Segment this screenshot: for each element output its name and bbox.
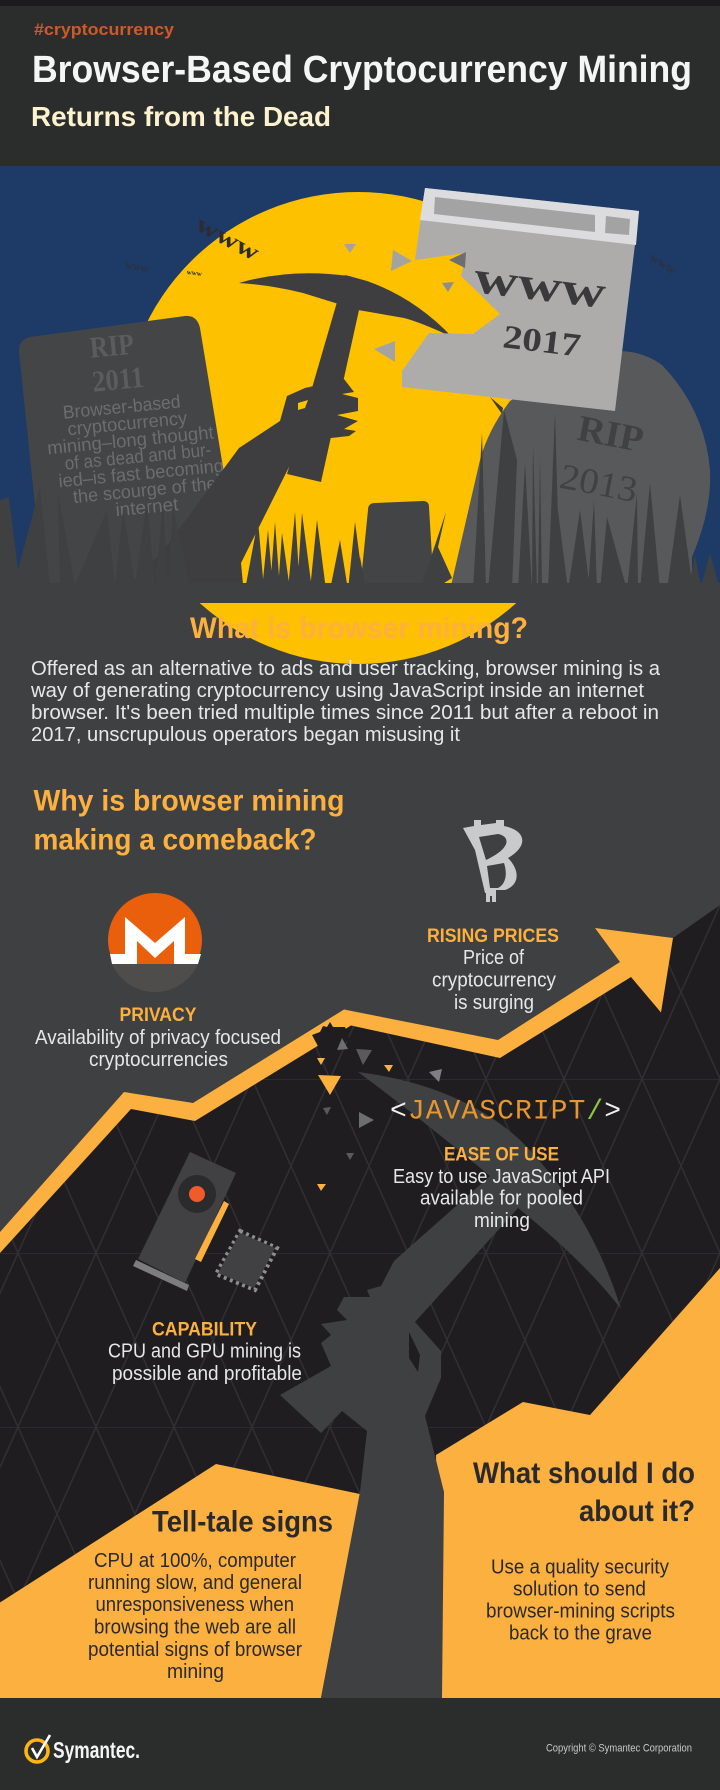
intro paragraph: Offered as an alternative to ads and user tracking, browser mining is a	[31, 658, 661, 680]
text: capability	[108, 1319, 302, 1385]
text: rising prices: cryptocurrency	[432, 970, 556, 992]
tombstone: RIP 2013	[450, 351, 710, 590]
text: tell-tale signs: CPU at 100%, computer	[94, 1550, 296, 1572]
tombstone: RIP 2011	[19, 316, 240, 592]
text: what should i do	[473, 1457, 695, 1645]
text: what should i do: browser-mining scripts	[486, 1600, 675, 1622]
tombstone: RIP 2011: RIP	[88, 328, 135, 365]
flying www bats: www	[124, 259, 150, 275]
header band	[0, 0, 720, 166]
text: what should i do: What should I do	[473, 1457, 695, 1490]
orange panel: left	[0, 1464, 360, 1698]
icon: graphics card	[133, 1152, 236, 1291]
tombstone: RIP 2011: the scourge of the	[72, 472, 217, 507]
logo: symantec	[26, 1735, 140, 1763]
text: rising prices: RISING PRICES	[427, 926, 559, 947]
text: what should i do: Use a quality security	[491, 1556, 669, 1578]
intro paragraph	[30, 658, 661, 746]
dark rising mountain panel	[0, 905, 720, 1700]
text: ease of use	[393, 1145, 610, 1232]
intro paragraph: 2017, unscrupulous operators began misusing it	[31, 724, 460, 746]
text: privacy	[35, 1005, 281, 1071]
moon	[122, 192, 594, 664]
tombstone: RIP 2013: RIP	[574, 408, 647, 461]
text: rising prices: is surging	[454, 992, 534, 1014]
rising arrow	[0, 928, 673, 1253]
grass	[0, 397, 720, 603]
night sky	[0, 166, 720, 591]
browser shards	[344, 244, 466, 362]
text: ease of use: Easy to use JavaScript API	[393, 1166, 610, 1188]
tombstone: RIP 2011: Browser-based	[62, 390, 181, 423]
tombstone: RIP 2011: mining–long thought	[46, 421, 214, 458]
intro paragraph: way of generating cryptocurrency using JavaScript inside an internet	[30, 680, 644, 702]
browser window being smashed	[402, 188, 639, 411]
text: ease of use: mining	[474, 1210, 530, 1232]
hand gap	[409, 1332, 420, 1372]
browser window being smashed: www	[471, 251, 609, 318]
browser window being smashed: 2017	[501, 319, 583, 365]
tombstone: RIP 2011: of as dead and bur-	[64, 439, 212, 474]
text: capability: CAPABILITY	[152, 1319, 257, 1340]
heading: why comeback: Why is browser mining	[34, 784, 344, 818]
heading: what is browser mining: What is browser mining?	[190, 612, 528, 645]
text: tell-tale signs: potential signs of browser	[88, 1639, 302, 1661]
text: tell-tale signs: Tell-tale signs	[152, 1506, 333, 1539]
text: ease of use: available for pooled	[420, 1188, 583, 1210]
hashtag: #cryptocurrency	[34, 20, 175, 39]
tombstone: RIP 2011: ied–is fast becoming	[57, 455, 225, 491]
text: privacy: Availability of privacy focused	[35, 1027, 281, 1049]
text: privacy: cryptocurrencies	[89, 1049, 228, 1071]
graveyard scene	[0, 166, 720, 664]
subtitle: Returns from the Dead	[31, 101, 331, 132]
text: what should i do: back to the grave	[509, 1623, 652, 1645]
arm and pickaxe silhouette	[280, 1072, 621, 1698]
tombstone: RIP 2013: 2013	[557, 456, 641, 510]
text: tell-tale signs	[88, 1506, 333, 1683]
icon: bitcoin	[463, 820, 522, 902]
text: what should i do: about it?	[579, 1495, 695, 1528]
icon: cpu chip	[216, 1231, 277, 1290]
flying www bats	[124, 211, 680, 278]
text: capability: possible and profitable	[112, 1363, 302, 1385]
title: Browser-Based Cryptocurrency Mining	[32, 49, 692, 91]
flying www bats: www	[186, 268, 203, 278]
text: rising prices	[427, 926, 559, 1014]
flying www bats: www	[191, 211, 264, 267]
raised arm with pickaxe	[120, 273, 452, 595]
text: what should i do: solution to send	[513, 1579, 646, 1601]
text: privacy: PRIVACY	[120, 1005, 197, 1026]
orange panel: right	[436, 1268, 720, 1698]
flying www bats: www	[648, 249, 680, 278]
text: ease of use: EASE OF USE	[444, 1145, 559, 1166]
text: capability: CPU and GPU mining is	[108, 1341, 301, 1363]
heading: why comeback	[34, 784, 344, 856]
copyright: Copyright © Symantec Corporation	[546, 1742, 692, 1754]
tombstone: RIP 2011: cryptocurrency	[67, 407, 189, 439]
logo: symantec: Symantec.	[53, 1737, 140, 1763]
footer	[0, 1698, 720, 1790]
tombstone: RIP 2011: internet	[114, 493, 179, 520]
small tombstone	[360, 501, 434, 590]
text: tell-tale signs: mining	[167, 1661, 224, 1683]
heading: why comeback: making a comeback?	[34, 824, 316, 856]
icon: monero	[108, 893, 202, 992]
text: tell-tale signs: running slow, and general	[88, 1572, 302, 1594]
tombstone: RIP 2011: 2011	[91, 361, 146, 399]
text: tell-tale signs: unresponsiveness when	[96, 1594, 294, 1616]
icon: javascript wordmark: <JAVASCRIPT/>	[390, 1096, 621, 1128]
intro paragraph: browser. It's been tried multiple times since 2011 but after a reboot in	[31, 702, 659, 724]
text: rising prices: Price of	[463, 947, 524, 969]
impact burst and shards	[312, 1022, 442, 1191]
text: tell-tale signs: browsing the web are all	[94, 1616, 296, 1638]
